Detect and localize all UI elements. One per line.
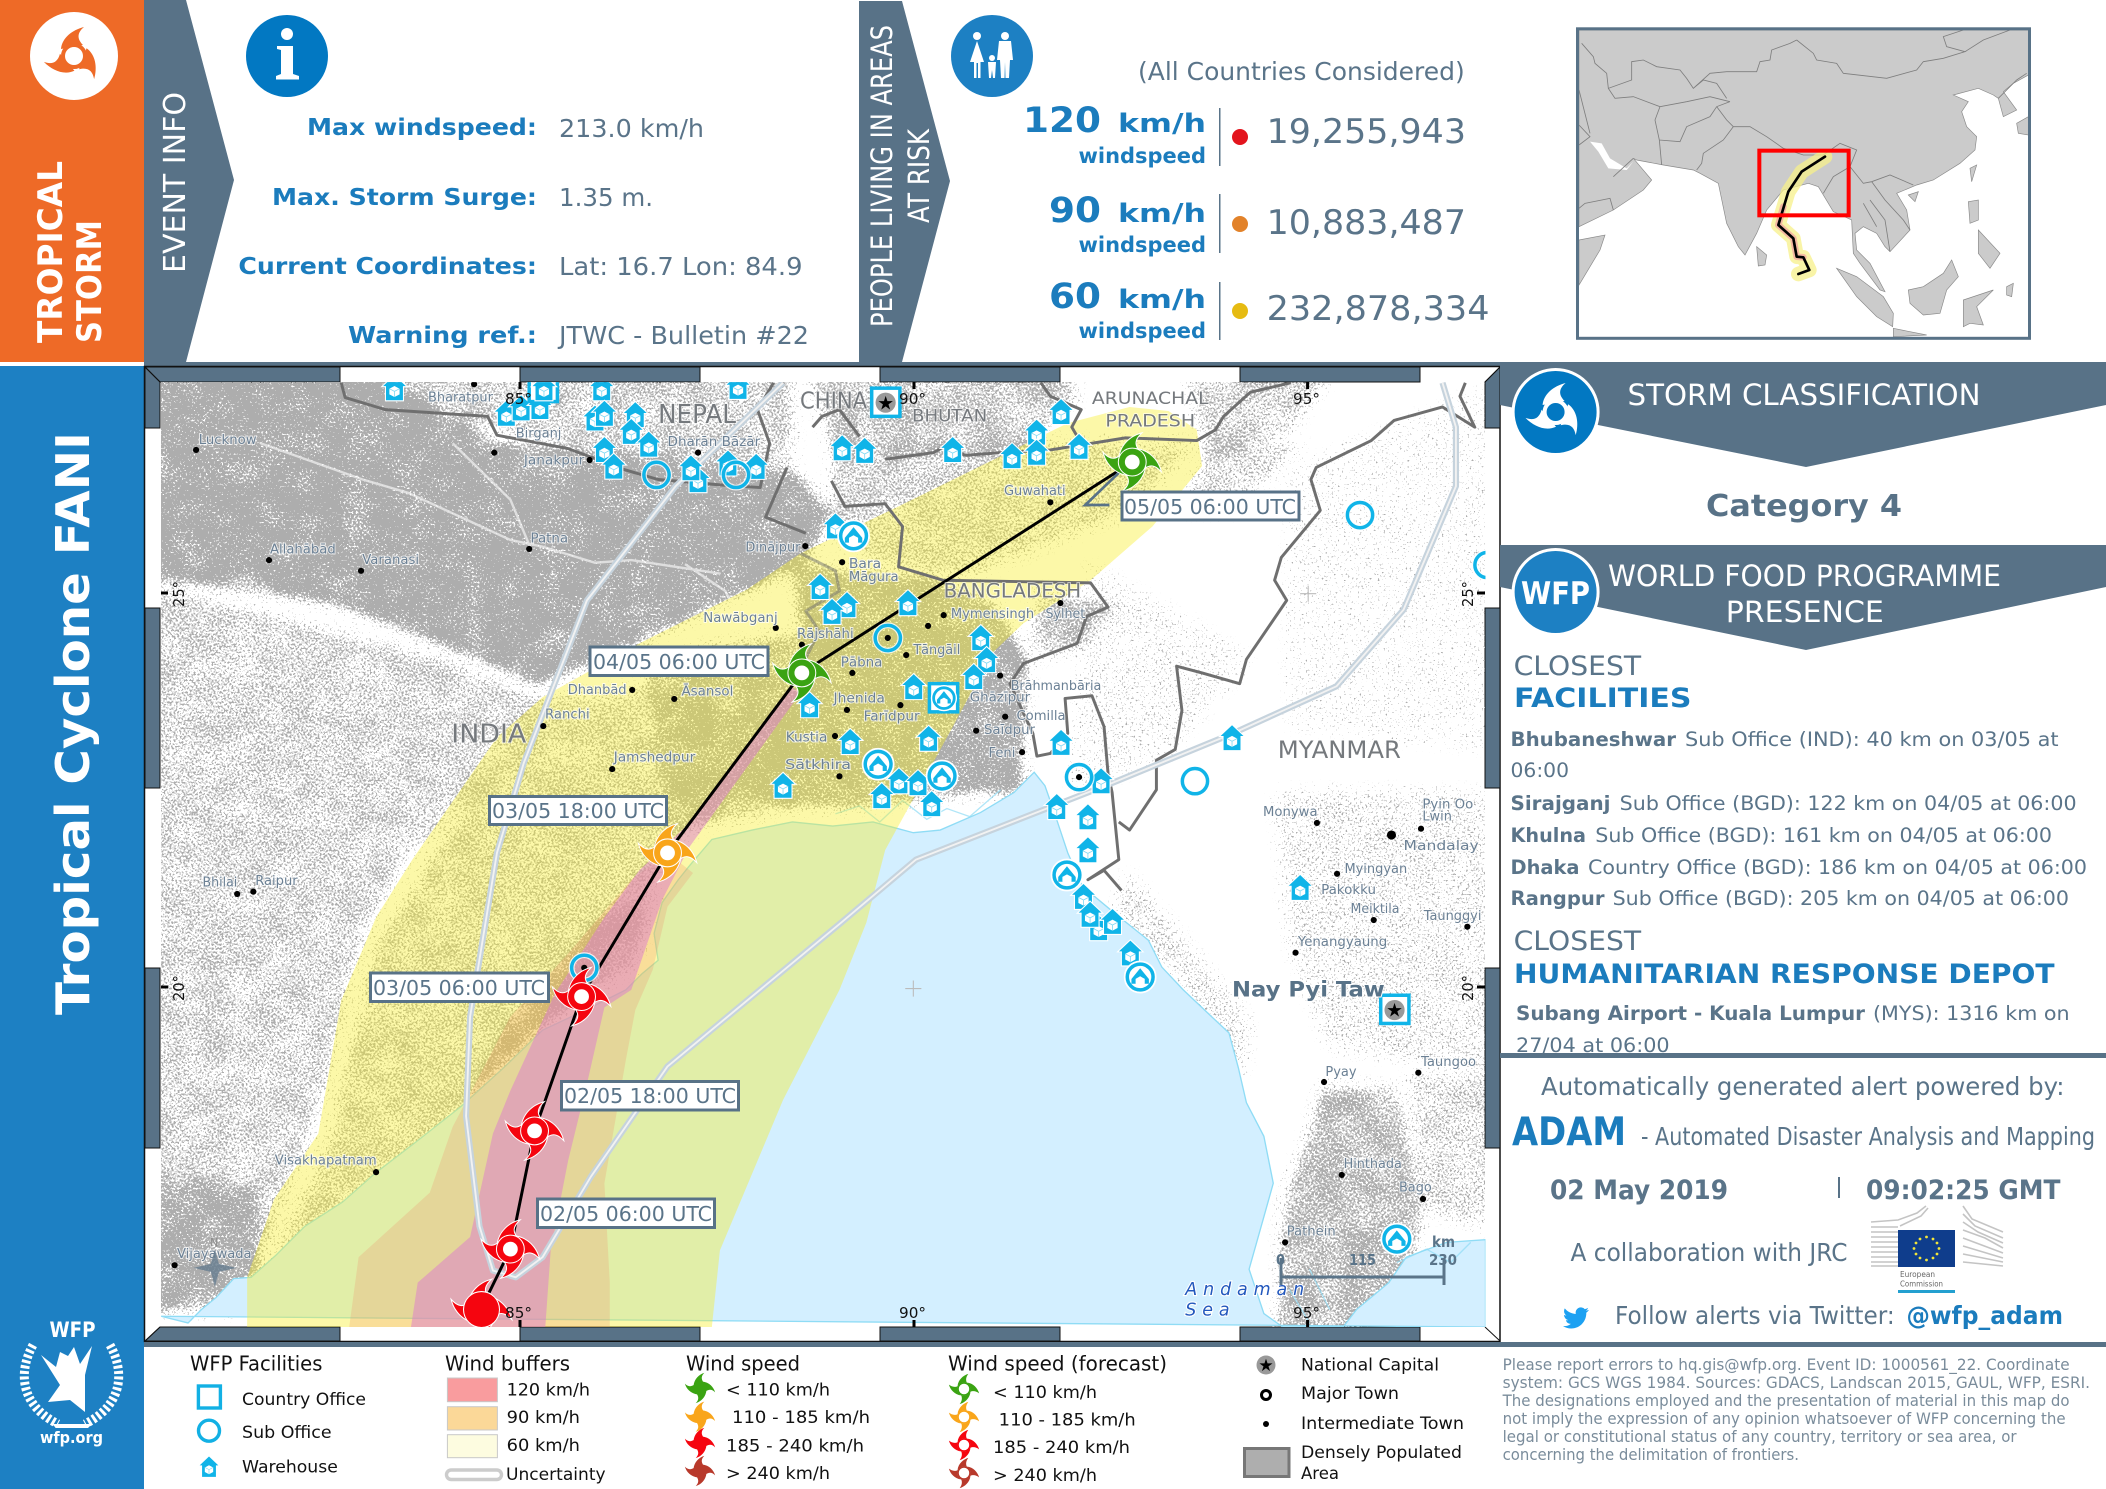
WFP warehouses bbox=[383, 374, 1312, 965]
place labels: Comilla bbox=[1016, 709, 1066, 724]
text block: disclaimer: not imply the expression of any opinion whatsoever of WFP concerning the bbox=[1503, 1409, 2066, 1428]
text block: disclaimer bbox=[1502, 1355, 2090, 1464]
text block: event details: Max. Storm Surge: bbox=[272, 185, 537, 211]
place labels: Jamshedpur bbox=[613, 751, 696, 766]
place labels: Hinthada bbox=[1344, 1157, 1402, 1172]
scale bar: 115 bbox=[1349, 1251, 1376, 1269]
text block: closest facilities: Country Office (BGD): 186 km on 04/05 at 06:00 bbox=[1588, 856, 2087, 879]
place labels: Pyay bbox=[1325, 1065, 1357, 1080]
graticule ticks and degree labels: 20° bbox=[1459, 975, 1477, 1001]
place labels: Pābna bbox=[841, 656, 882, 671]
text block: event details: Current Coordinates: bbox=[238, 254, 537, 280]
stat: 120 km/h population: 19,255,943 bbox=[1267, 112, 1466, 152]
place labels: Patna bbox=[531, 531, 568, 546]
legend: wind speed: > 240 km/h bbox=[726, 1464, 830, 1484]
place labels: Monywa bbox=[1263, 805, 1318, 820]
icon: twitter bird bbox=[1563, 1307, 1589, 1328]
wind buffer: 120 km/h bbox=[411, 686, 800, 1327]
legend: WFP facilities: Country Office bbox=[242, 1390, 366, 1410]
text block: closest facilities: Rangpur bbox=[1510, 887, 1605, 910]
place labels: Feni bbox=[989, 746, 1015, 761]
graticule ticks and degree labels: 85° bbox=[505, 1304, 532, 1322]
rivers bbox=[260, 442, 754, 646]
forecast uncertainty cone bbox=[466, 383, 1456, 1277]
legend: wind speed forecast bbox=[948, 1352, 1167, 1488]
national capital markers: ★ bbox=[877, 393, 894, 414]
place labels: Pakokku bbox=[1321, 883, 1376, 898]
place labels: Lucknow bbox=[199, 433, 257, 448]
legend: settlements and density: Densely Populated bbox=[1301, 1443, 1462, 1463]
legend: wind speed: 185 - 240 km/h bbox=[726, 1437, 864, 1457]
stat: 60 km/h population: 232,878,334 bbox=[1267, 289, 1490, 329]
place labels: Yenangyaung bbox=[1297, 935, 1387, 950]
place labels: Saīdpur bbox=[984, 723, 1035, 738]
text block: event details: Max windspeed: bbox=[307, 115, 537, 141]
country labels: BHUTAN bbox=[912, 406, 987, 426]
text block: disclaimer: system: GCS WGS 1984. Sources: GDACS, Landscan 2015, GAUL, WFP, ESRI. bbox=[1503, 1373, 2090, 1392]
icon: WFP badge bbox=[1512, 548, 1600, 636]
text block: closest facilities: Khulna bbox=[1510, 824, 1586, 847]
legend: wind buffers: 120 km/h bbox=[507, 1381, 590, 1401]
place labels: Mymensingh bbox=[951, 607, 1034, 622]
country labels: PRADESH bbox=[1105, 411, 1195, 431]
country labels: MYANMAR bbox=[1278, 736, 1401, 764]
densely populated area speckle bbox=[121, 349, 1518, 1343]
logo: WFP wreath: wfp.org bbox=[40, 1428, 103, 1447]
text block: closest facilities: Sub Office (IND): 40 km on 03/05 at bbox=[1685, 728, 2059, 751]
place labels: Bara bbox=[849, 557, 881, 572]
text block: ADAM credit: ADAM bbox=[1512, 1110, 1626, 1155]
panel: storm type orange header bbox=[0, 0, 144, 362]
stat: 120 km/h population: windspeed bbox=[1078, 144, 1206, 168]
WFP sub offices bbox=[572, 462, 1500, 1253]
place labels: Kustia bbox=[786, 730, 827, 745]
text block: event details bbox=[238, 114, 809, 350]
place labels: Taunggyi bbox=[1423, 909, 1481, 924]
text block: closest depot: CLOSEST bbox=[1514, 926, 1642, 957]
wind buffer: 90 km/h bbox=[349, 853, 693, 1327]
place labels bbox=[177, 391, 1481, 1262]
place labels: Pathein bbox=[1287, 1225, 1336, 1240]
place labels: Dinājpur bbox=[745, 541, 801, 556]
text block: closest facilities: Sub Office (BGD): 161 km on 04/05 at 06:00 bbox=[1595, 824, 2052, 847]
country labels: NEPAL bbox=[658, 400, 737, 430]
legend: settlements and density: Intermediate Town bbox=[1301, 1414, 1464, 1434]
legend: settlements and density: Major Town bbox=[1301, 1384, 1399, 1404]
country labels bbox=[451, 388, 1401, 764]
graticule ticks and degree labels bbox=[161, 382, 1485, 1327]
text block: ADAM credit: Automatically generated alert powered by: bbox=[1541, 1072, 2064, 1101]
heading: storm: STORM bbox=[70, 220, 110, 343]
slate rule above map bbox=[144, 362, 1500, 366]
legend: wind speed forecast: 110 - 185 km/h bbox=[999, 1411, 1136, 1431]
logo: European Commission: European bbox=[1900, 1270, 1935, 1279]
storm position icons bbox=[452, 434, 1160, 1339]
WFP country offices bbox=[529, 373, 1409, 1023]
place labels: Dhanbād bbox=[568, 683, 627, 698]
text block: event details: 1.35 m. bbox=[559, 183, 653, 212]
reference crosses bbox=[905, 586, 1316, 997]
sea label: Andaman bbox=[1184, 1280, 1304, 1300]
place labels: Ranchi bbox=[545, 708, 590, 723]
icon: info bbox=[246, 15, 328, 97]
text block: disclaimer: legal or constitutional status of any country, territory or sea area, or bbox=[1503, 1427, 2017, 1446]
place labels: Guwahati bbox=[1004, 484, 1066, 499]
inset storm swath bbox=[1778, 157, 1825, 274]
place labels: Tāngāil bbox=[912, 643, 960, 658]
legend: wind speed: Wind speed bbox=[686, 1352, 800, 1376]
text block: all countries: (All Countries Considered) bbox=[1138, 57, 1465, 86]
panel: event info banner bbox=[144, 0, 234, 362]
place labels: Dharān Bāzār bbox=[668, 435, 761, 450]
text block: ADAM credit: A collaboration with JRC bbox=[1570, 1238, 1848, 1267]
graticule ticks and degree labels: 25° bbox=[170, 581, 188, 607]
text block: closest facilities: Sirajganj bbox=[1510, 792, 1610, 815]
stat: 90 km/h population: km/h bbox=[1118, 199, 1206, 229]
legend: WFP facilities bbox=[190, 1352, 366, 1478]
twitter follow line: Follow alerts via Twitter: bbox=[1615, 1301, 1895, 1330]
text block: disclaimer: concerning the delimitation of frontiers. bbox=[1503, 1445, 1799, 1464]
heading: at risk: AT RISK bbox=[902, 128, 936, 223]
stat: 120 km/h population bbox=[1023, 101, 1466, 168]
twitter follow line bbox=[1563, 1301, 2063, 1330]
legend: settlements and density bbox=[1244, 1356, 1464, 1484]
heading: presence: PRESENCE bbox=[1726, 595, 1884, 629]
text block: closest depot: Subang Airport - Kuala Lumpur bbox=[1516, 1002, 1865, 1025]
legend: wind speed: 110 - 185 km/h bbox=[732, 1408, 870, 1428]
stat: 90 km/h population: 90 bbox=[1049, 191, 1101, 231]
sea label: Sea bbox=[1185, 1301, 1230, 1321]
legend: wind buffers: Uncertainty bbox=[506, 1465, 606, 1485]
text block: closest facilities: CLOSEST bbox=[1514, 651, 1642, 682]
text block: closest depot: 27/04 at 06:00 bbox=[1516, 1034, 1670, 1057]
legend: wind speed forecast: Wind speed (forecast) bbox=[948, 1352, 1167, 1376]
legend: wind speed forecast: 185 - 240 km/h bbox=[993, 1438, 1130, 1458]
town markers bbox=[172, 381, 1470, 1268]
panel: people at risk banner bbox=[859, 1, 950, 362]
text block: closest depot: (MYS): 1316 km on bbox=[1873, 1002, 2070, 1025]
place labels: Varanasi bbox=[362, 553, 419, 568]
panel: WFP presence bbox=[1500, 545, 2106, 650]
icon: people bbox=[951, 15, 1033, 97]
storm track line bbox=[481, 462, 1132, 1310]
text block: ADAM credit: 09:02:25 GMT bbox=[1866, 1175, 2061, 1206]
place labels: Bhilai bbox=[203, 875, 237, 890]
icon: cyclone badge bbox=[1512, 368, 1600, 456]
legend: WFP facilities: WFP Facilities bbox=[190, 1352, 322, 1376]
country labels: BANGLADESH bbox=[944, 580, 1081, 603]
legend: wind buffers: Wind buffers bbox=[445, 1352, 570, 1376]
text block: closest depot: HUMANITARIAN RESPONSE DEPOT bbox=[1514, 959, 2055, 990]
place labels: Sylhet bbox=[1045, 607, 1085, 622]
date label: 02/05 06:00: 02/05 06:00 UTC bbox=[540, 1202, 712, 1226]
twitter follow line: @wfp_adam bbox=[1906, 1301, 2063, 1330]
legend: settlements and density: Area bbox=[1301, 1464, 1339, 1484]
scale bar: km bbox=[1432, 1233, 1455, 1251]
text block: closest depot bbox=[1514, 926, 2070, 1057]
sea bbox=[161, 772, 1485, 1327]
scale bar: 0 bbox=[1276, 1251, 1285, 1269]
stat: 60 km/h population: km/h bbox=[1118, 285, 1206, 315]
country borders bbox=[341, 383, 1475, 890]
date label: 02/05 18:00: 02/05 18:00 UTC bbox=[564, 1084, 736, 1108]
stat: 120 km/h population: km/h bbox=[1118, 109, 1206, 139]
date label: 04/05 06:00: 04/05 06:00 UTC bbox=[593, 650, 765, 674]
place labels: Bharatpur bbox=[428, 391, 493, 406]
place labels: Janakpur bbox=[523, 454, 585, 469]
graticule ticks and degree labels: 20° bbox=[170, 975, 188, 1001]
heading: world food programme: WORLD FOOD PROGRAMME bbox=[1608, 559, 2001, 593]
inset locator map bbox=[1577, 28, 2030, 339]
legend: wind buffers bbox=[445, 1352, 606, 1485]
text block: closest facilities: FACILITIES bbox=[1514, 683, 1692, 714]
place labels: Visakhapatnam bbox=[275, 1153, 377, 1168]
legend: WFP facilities: Warehouse bbox=[242, 1458, 338, 1478]
graticule ticks and degree labels: 85° bbox=[505, 390, 532, 408]
country labels: INDIA bbox=[451, 720, 527, 750]
place labels: Sātkhira bbox=[785, 758, 851, 773]
capital label: Nay Pyi Taw bbox=[1232, 978, 1385, 1003]
date label: 03/05 18:00: 03/05 18:00 UTC bbox=[492, 799, 664, 823]
text block: closest facilities: Dhaka bbox=[1510, 856, 1580, 879]
legend: wind speed bbox=[685, 1352, 870, 1486]
text block: event details: JTWC - Bulletin #22 bbox=[557, 321, 809, 350]
text block: closest facilities bbox=[1510, 651, 2087, 910]
wind buffer: 60 km/h bbox=[247, 407, 1202, 1327]
place labels: Māgura bbox=[849, 570, 899, 585]
divider bbox=[1500, 1053, 2106, 1058]
stat: 120 km/h population: 120 bbox=[1023, 101, 1101, 141]
north arrow: N bbox=[210, 1235, 219, 1249]
icon: WFP badge: WFP bbox=[1521, 576, 1590, 612]
text block: event details: 213.0 km/h bbox=[559, 114, 704, 143]
legend: wind buffers: 90 km/h bbox=[507, 1408, 580, 1428]
place labels: Mandalay bbox=[1404, 839, 1479, 854]
title: Tropical Cyclone FANI bbox=[46, 432, 100, 1015]
place labels: Bago bbox=[1399, 1180, 1432, 1195]
logo: WFP wreath: WFP bbox=[50, 1318, 96, 1342]
place labels: Ghāzīpur bbox=[970, 691, 1031, 706]
graticule ticks and degree labels: 25° bbox=[1459, 581, 1477, 607]
place labels: Pyin Oo bbox=[1422, 797, 1473, 812]
label leader bbox=[1085, 473, 1119, 505]
place labels: Vijayawada bbox=[177, 1247, 252, 1262]
logo: WFP wreath bbox=[24, 1318, 119, 1447]
map frame with graticule bands bbox=[144, 366, 1500, 1342]
inset red extent box bbox=[1759, 151, 1849, 215]
graticule ticks and degree labels: 95° bbox=[1293, 1304, 1320, 1322]
stat: 60 km/h population: 60 bbox=[1049, 277, 1101, 317]
place labels: Meiktila bbox=[1350, 902, 1400, 917]
place labels: Taungoo bbox=[1420, 1055, 1476, 1070]
date label: 05/05 06:00: 05/05 06:00 UTC bbox=[1124, 495, 1296, 519]
country labels: ARUNACHAL bbox=[1092, 388, 1209, 408]
north arrow bbox=[193, 1235, 236, 1287]
heading: tropical: TROPICAL bbox=[31, 161, 71, 343]
legend: settlements and density: National Capital bbox=[1301, 1356, 1439, 1376]
legend: wind speed forecast: < 110 km/h bbox=[993, 1383, 1097, 1403]
text block: closest facilities: Sub Office (BGD): 122 km on 04/05 at 06:00 bbox=[1620, 792, 2077, 815]
stat: 90 km/h population bbox=[1049, 191, 1466, 257]
logo: European Commission: Commission bbox=[1900, 1280, 1943, 1288]
stat: 60 km/h population: windspeed bbox=[1078, 319, 1206, 343]
heading: storm classification: STORM CLASSIFICATION bbox=[1628, 378, 1980, 412]
text block: disclaimer: The designations employed and the presentation of material in this map do bbox=[1502, 1391, 2070, 1410]
national capital markers: ★ bbox=[1386, 1001, 1403, 1022]
graticule ticks and degree labels: 90° bbox=[899, 1304, 926, 1322]
icon: white cyclone badge bbox=[30, 12, 118, 100]
country labels: CHINA bbox=[800, 388, 867, 414]
stat: 60 km/h population bbox=[1049, 277, 1490, 343]
place labels: Birganj bbox=[516, 426, 561, 441]
text block: ADAM credit bbox=[1512, 1072, 2095, 1267]
slate rule below map bbox=[144, 1342, 2106, 1347]
place labels: Myingyan bbox=[1344, 862, 1407, 877]
text block: event details: Warning ref.: bbox=[348, 323, 537, 349]
stat: 90 km/h population: windspeed bbox=[1078, 233, 1206, 257]
panel: blue title sidebar bbox=[0, 366, 144, 1489]
date label: 03/05 06:00: 03/05 06:00 UTC bbox=[373, 976, 545, 1000]
place labels: Raipur bbox=[255, 874, 298, 889]
panel: storm classification bbox=[1500, 362, 2106, 524]
logo: European Commission bbox=[1871, 1206, 2003, 1293]
graticule ticks and degree labels: 95° bbox=[1293, 390, 1320, 408]
place labels: Jhenida bbox=[833, 691, 885, 706]
text block: event details: Lat: 16.7 Lon: 84.9 bbox=[559, 252, 802, 281]
graticule ticks and degree labels: 90° bbox=[899, 390, 926, 408]
main map: cyclone track over Bay of Bengal bbox=[121, 349, 2106, 1488]
legend: wind speed: < 110 km/h bbox=[726, 1381, 830, 1401]
legend: wind buffers: 60 km/h bbox=[507, 1436, 580, 1456]
text block: closest facilities: Bhubaneshwar bbox=[1510, 728, 1676, 751]
place labels: Nawābganj bbox=[703, 611, 778, 626]
text block: closest facilities: 06:00 bbox=[1510, 759, 1569, 782]
legend: WFP facilities: Sub Office bbox=[242, 1423, 332, 1443]
sea label bbox=[1184, 1280, 1304, 1321]
place labels: Rājshāhi bbox=[797, 627, 854, 642]
stat: 90 km/h population: 10,883,487 bbox=[1267, 203, 1466, 243]
category value: Category 4 bbox=[1706, 489, 1902, 524]
place labels: Allahābād bbox=[270, 542, 336, 557]
legend: wind speed forecast: > 240 km/h bbox=[993, 1466, 1097, 1486]
place labels: Brāhmanbāria bbox=[1011, 679, 1101, 694]
scale bar: 230 bbox=[1429, 1251, 1457, 1269]
place labels: Farīdpur bbox=[864, 710, 920, 725]
place labels: Āsansol bbox=[681, 683, 733, 700]
text block: closest facilities: Sub Office (BGD): 205 km on 04/05 at 06:00 bbox=[1613, 887, 2069, 910]
legend: settlements and density: ★ bbox=[1258, 1356, 1274, 1376]
coastal channels bbox=[835, 790, 1471, 1323]
text block: ADAM credit: 02 May 2019 bbox=[1550, 1175, 1728, 1206]
scale bar bbox=[1276, 1233, 1457, 1285]
national capital markers bbox=[876, 393, 1405, 1022]
heading: event info: EVENT INFO bbox=[158, 92, 193, 273]
text block: disclaimer: Please report errors to hq.gis@wfp.org. Event ID: 1000561_22. Coordinate bbox=[1503, 1355, 2070, 1375]
place labels: Lwin bbox=[1422, 810, 1452, 825]
